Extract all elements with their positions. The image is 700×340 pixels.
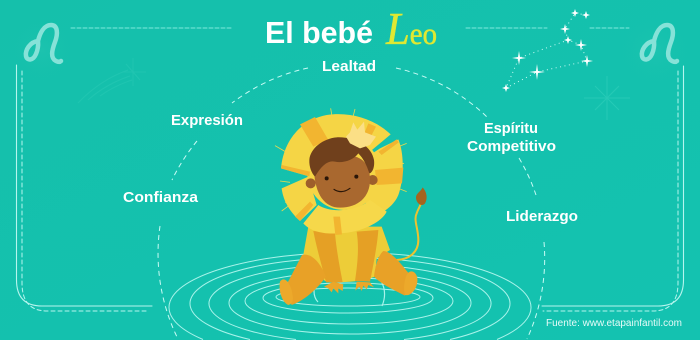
ears bbox=[306, 178, 316, 188]
title: Leo bbox=[385, 3, 437, 54]
face bbox=[314, 155, 370, 208]
trait labels bbox=[123, 59, 578, 225]
icon: faint star bbox=[584, 76, 630, 120]
title bbox=[265, 3, 437, 54]
trait labels: Espíritu bbox=[484, 121, 538, 137]
icon: leo symbol right bbox=[642, 25, 677, 62]
arms bbox=[313, 231, 343, 282]
trait labels: Competitivo bbox=[467, 139, 556, 155]
decorative frame bbox=[16, 28, 684, 311]
collar bbox=[303, 200, 387, 234]
mane spikes bbox=[275, 108, 407, 211]
icon: faint shooting star bbox=[78, 58, 146, 103]
trait labels: Confianza bbox=[123, 190, 199, 206]
trait labels: Liderazgo bbox=[506, 209, 578, 225]
icon: leo symbol left bbox=[26, 25, 61, 62]
dashed circle arcs bbox=[158, 68, 545, 339]
tail bbox=[397, 187, 427, 260]
ripples on the floor bbox=[169, 252, 531, 340]
crown bbox=[346, 122, 376, 148]
eyes and mouth bbox=[325, 176, 329, 180]
legs bbox=[285, 255, 326, 305]
mane base bbox=[307, 137, 381, 210]
hair bbox=[309, 137, 374, 177]
hands bbox=[324, 282, 343, 293]
mane orange segments bbox=[300, 117, 328, 147]
body and limbs bbox=[280, 227, 417, 305]
title: El bebé bbox=[265, 15, 373, 50]
body bbox=[303, 227, 390, 282]
baby lion illustration bbox=[275, 108, 427, 305]
mane, collar and head bbox=[275, 108, 407, 235]
trait labels: Lealtad bbox=[322, 59, 376, 75]
trait labels: Expresión bbox=[171, 113, 243, 129]
source credit: Fuente: www.etapainfantil.com bbox=[546, 318, 682, 329]
icon: leo constellation bbox=[502, 9, 593, 92]
mane lobes bbox=[281, 114, 391, 177]
